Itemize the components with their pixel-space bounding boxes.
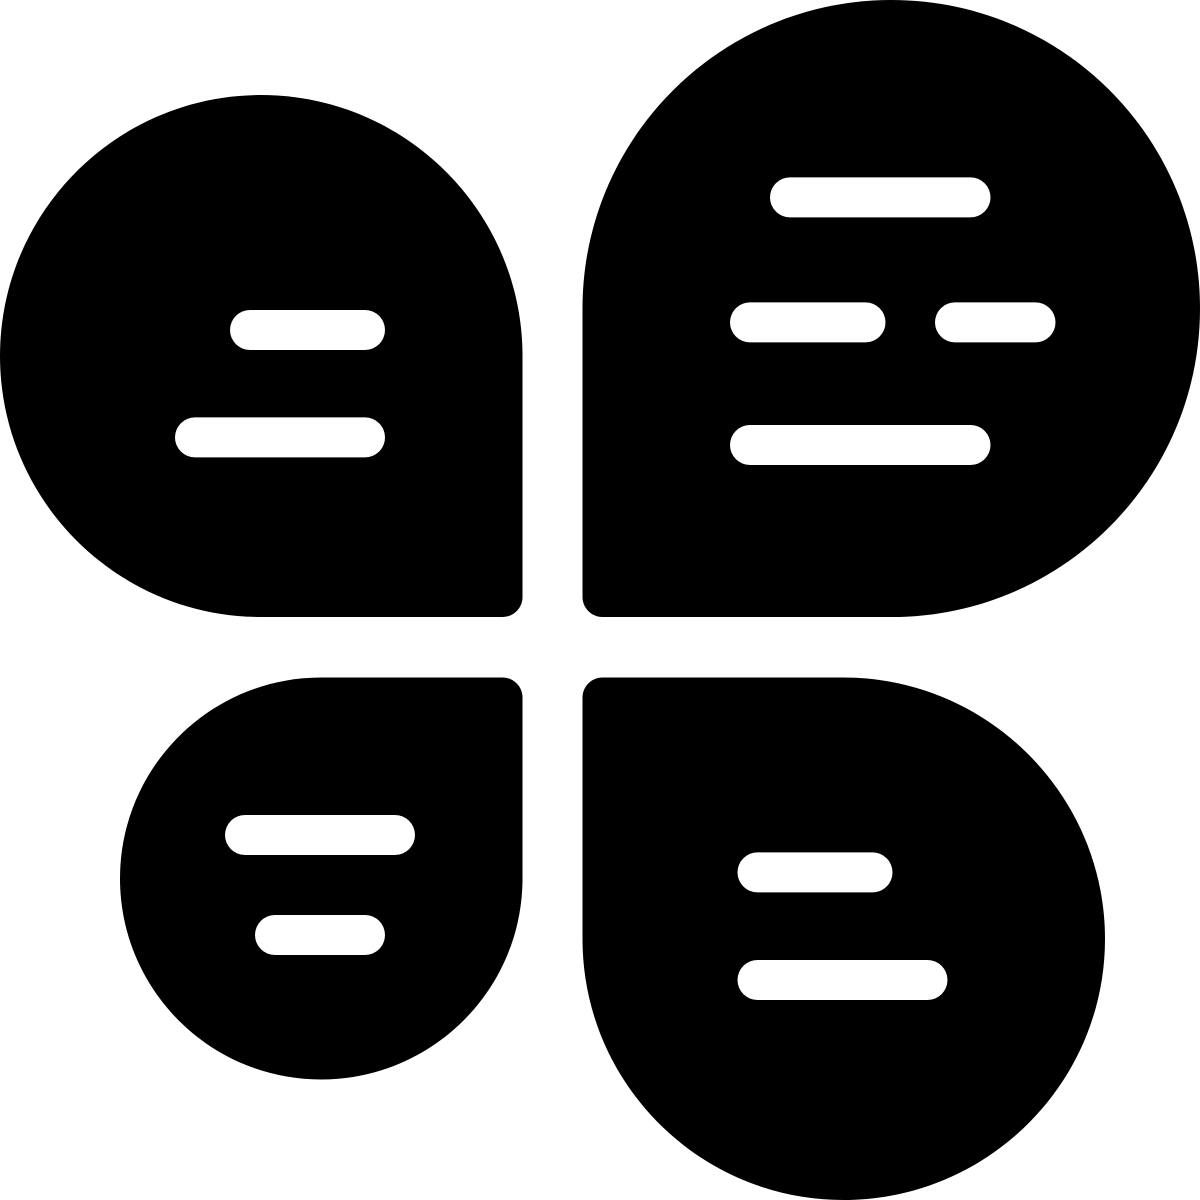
panel: top-left speech bubble (0, 95, 522, 617)
panel: bottom-left speech bubble (120, 678, 522, 1080)
panel: bottom-right speech bubble (582, 678, 1105, 1200)
panel: top-right speech bubble (582, 0, 1200, 617)
